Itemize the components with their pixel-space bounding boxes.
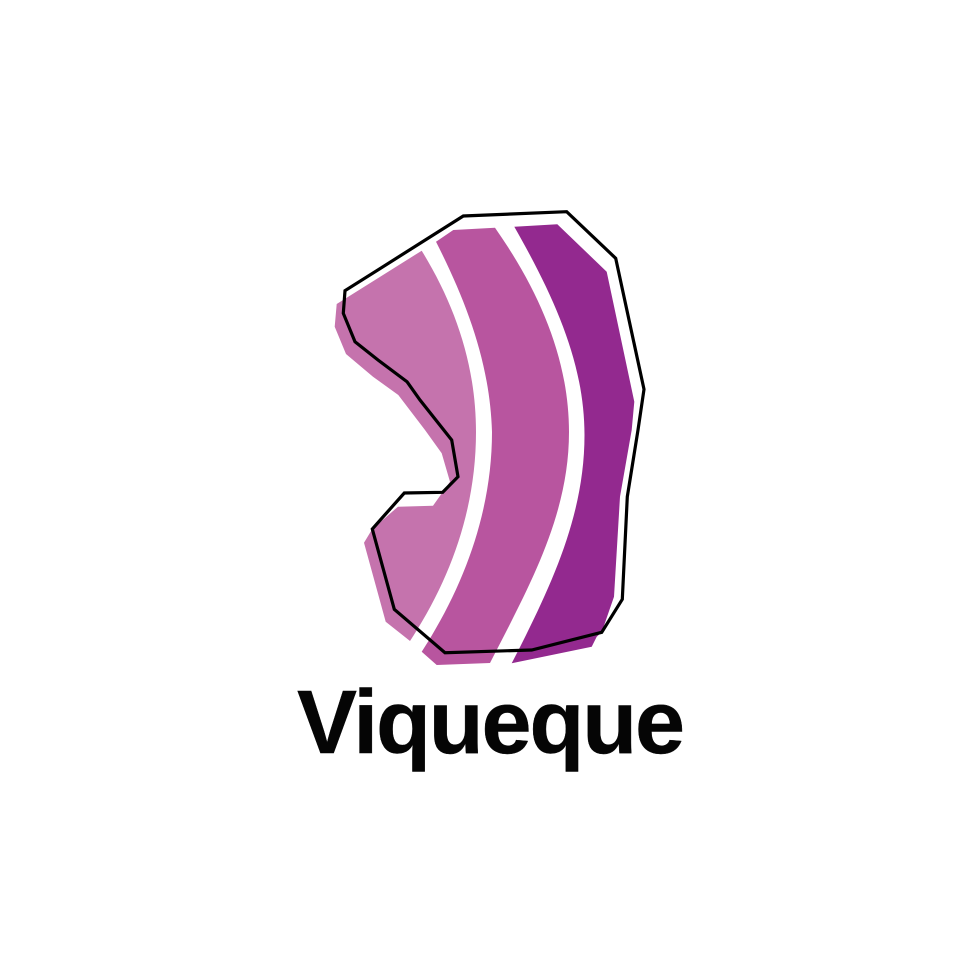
map outline: black border [343, 212, 644, 653]
title: Viqueque: Viqueque [297, 673, 683, 773]
map band: right deep purple [512, 224, 634, 663]
map band: left light pink [335, 251, 476, 641]
map: Viqueque district [335, 212, 644, 665]
map band: middle magenta [422, 228, 569, 665]
